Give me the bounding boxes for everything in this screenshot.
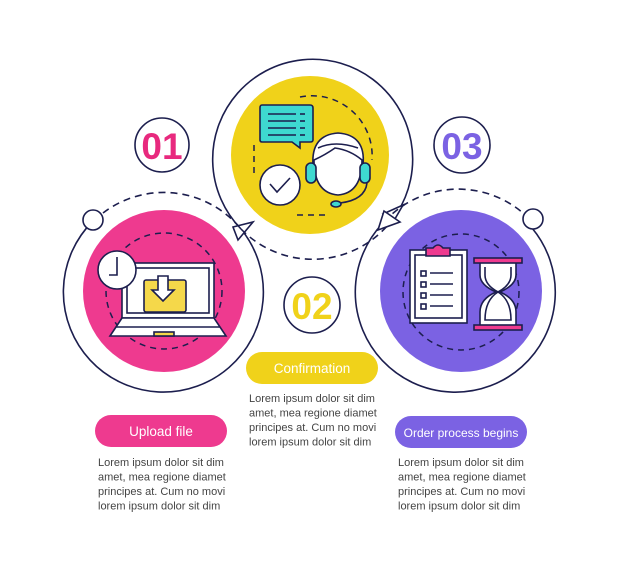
text: step 3 description: lorem ipsum dolor sit dim bbox=[398, 500, 520, 512]
pill: Upload file bbox=[95, 415, 227, 447]
text: step 1 description bbox=[98, 457, 226, 512]
pill: Order process begins bbox=[395, 416, 527, 448]
badge: 01 bbox=[135, 118, 189, 172]
purple circle bbox=[380, 210, 542, 372]
text: step 2 description: lorem ipsum dolor sit dim bbox=[249, 436, 371, 448]
icon: clipboard bbox=[410, 245, 467, 323]
icon: hourglass bbox=[474, 258, 522, 330]
arrow step3 bbox=[378, 211, 400, 230]
text: step 3 description: principes at. Cum no movi bbox=[398, 486, 525, 498]
outer ring step 3 bbox=[355, 189, 555, 392]
text: step 1 description: Lorem ipsum dolor sit dim bbox=[98, 457, 224, 469]
text: step 1 description: lorem ipsum dolor sit dim bbox=[98, 500, 220, 512]
text: step 2 description: amet, mea regione diamet bbox=[249, 408, 377, 420]
yellow circle bbox=[231, 76, 389, 234]
text: step 2 description: Lorem ipsum dolor sit dim bbox=[249, 393, 375, 405]
text: step 3 description: Lorem ipsum dolor sit dim bbox=[398, 457, 524, 469]
panel: step 2 confirmation bbox=[213, 59, 413, 259]
pill: Confirmation: Confirmation bbox=[274, 361, 350, 376]
icon: check bbox=[260, 165, 300, 205]
icon: laptop download bbox=[98, 251, 226, 336]
arrow step2 bbox=[383, 205, 403, 224]
badge: 03 bbox=[434, 117, 490, 173]
pill: Upload file: Upload file bbox=[129, 424, 193, 439]
text: step 3 description bbox=[398, 457, 526, 512]
badge: 02 bbox=[284, 277, 340, 333]
pink circle bbox=[83, 210, 245, 372]
text: step 1 description: amet, mea regione diamet bbox=[98, 472, 226, 484]
badge: 02: 02 bbox=[291, 286, 333, 327]
badge: 01: 01 bbox=[141, 126, 183, 167]
icon: chat bubble bbox=[260, 105, 313, 148]
text: step 2 description bbox=[249, 393, 377, 448]
outer ring step 2 bbox=[213, 59, 413, 259]
pill: Confirmation bbox=[246, 352, 378, 384]
panel: step 3 order bbox=[355, 189, 555, 392]
text: step 1 description: principes at. Cum no movi bbox=[98, 486, 225, 498]
text: step 3 description: amet, mea regione diamet bbox=[398, 472, 526, 484]
text: step 2 description: principes at. Cum no movi bbox=[249, 422, 376, 434]
badge: 03: 03 bbox=[441, 126, 483, 167]
arrow step1 bbox=[233, 222, 253, 240]
outer ring step 1 bbox=[63, 192, 263, 392]
icon: operator headset bbox=[306, 133, 370, 207]
panel: step 1 upload bbox=[63, 192, 263, 392]
pill: Order process begins: Order process begins bbox=[404, 426, 518, 440]
